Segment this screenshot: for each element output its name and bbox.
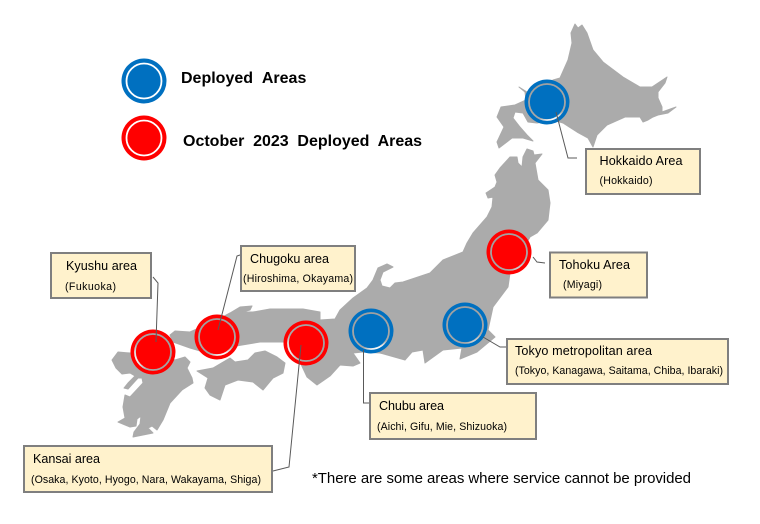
leader line: Kansai bbox=[273, 345, 301, 471]
callout: Kyushu: (Fukuoka) bbox=[65, 281, 116, 293]
callout: Chugoku bbox=[241, 246, 355, 291]
legend icon: October 2023 bbox=[122, 116, 166, 160]
marker: Chugoku, October 2023 bbox=[194, 314, 240, 360]
callout: Hokkaido bbox=[586, 149, 700, 194]
leader line: Hokkaido bbox=[556, 112, 577, 158]
leader line: Chugoku bbox=[218, 255, 240, 330]
marker: Kansai, October 2023 bbox=[284, 320, 328, 366]
callout: Tohoku: Tohoku Area bbox=[559, 258, 630, 272]
callout: Tokyo metropolitan: (Tokyo, Kanagawa, Saitama, Chiba, Ibaraki) bbox=[515, 365, 723, 377]
callout: Chubu: Chubu area bbox=[379, 399, 444, 413]
marker: Hokkaido, deployed bbox=[524, 80, 570, 124]
legend bbox=[122, 58, 422, 160]
marker: Chubu, deployed bbox=[348, 308, 394, 354]
island: Honshu bbox=[170, 149, 550, 385]
legend label: October 2023: October 2023 Deployed Areas bbox=[183, 133, 422, 150]
leader line: Tokyo metropolitan bbox=[483, 337, 506, 347]
callout: Chugoku: (Hiroshima, Okayama) bbox=[243, 273, 353, 285]
callout: Kansai: Kansai area bbox=[33, 452, 100, 466]
marker: Kyushu, October 2023 bbox=[130, 330, 176, 374]
callout: Hokkaido: Hokkaido Area bbox=[600, 154, 682, 168]
island: Hokkaido bbox=[497, 24, 676, 148]
callout: Hokkaido: (Hokkaido) bbox=[600, 175, 652, 187]
callout: Kansai bbox=[24, 446, 272, 492]
legend icon: deployed bbox=[122, 58, 166, 104]
marker: Tohoku, October 2023 bbox=[486, 230, 532, 274]
callout: Tokyo metropolitan bbox=[507, 339, 728, 384]
callout: Chugoku: Chugoku area bbox=[250, 252, 329, 266]
callout: Tohoku: (Miyagi) bbox=[563, 279, 602, 291]
callout: Chubu: (Aichi, Gifu, Mie, Shizuoka) bbox=[377, 421, 507, 433]
legend label: deployed: Deployed Areas bbox=[181, 70, 306, 87]
leader line: Chubu bbox=[364, 350, 369, 403]
leader line: Kyushu bbox=[153, 277, 158, 342]
map of Japan bbox=[112, 24, 676, 437]
callout: Kyushu: Kyushu area bbox=[66, 259, 137, 273]
callout: Chubu bbox=[370, 393, 536, 439]
island: Shikoku bbox=[197, 351, 285, 400]
callout: Tokyo metropolitan: Tokyo metropolitan area bbox=[515, 344, 652, 358]
footnote: *There are some areas where service cannot be provided bbox=[312, 470, 691, 487]
island: Kyushu bbox=[112, 350, 193, 437]
marker: Tokyo metropolitan, deployed bbox=[442, 302, 488, 348]
leader line: Tohoku bbox=[533, 257, 545, 263]
callout: Tohoku bbox=[550, 252, 647, 298]
callout: Kansai: (Osaka, Kyoto, Hyogo, Nara, Wakayama, Shiga) bbox=[31, 474, 261, 486]
callout: Kyushu bbox=[51, 253, 151, 298]
